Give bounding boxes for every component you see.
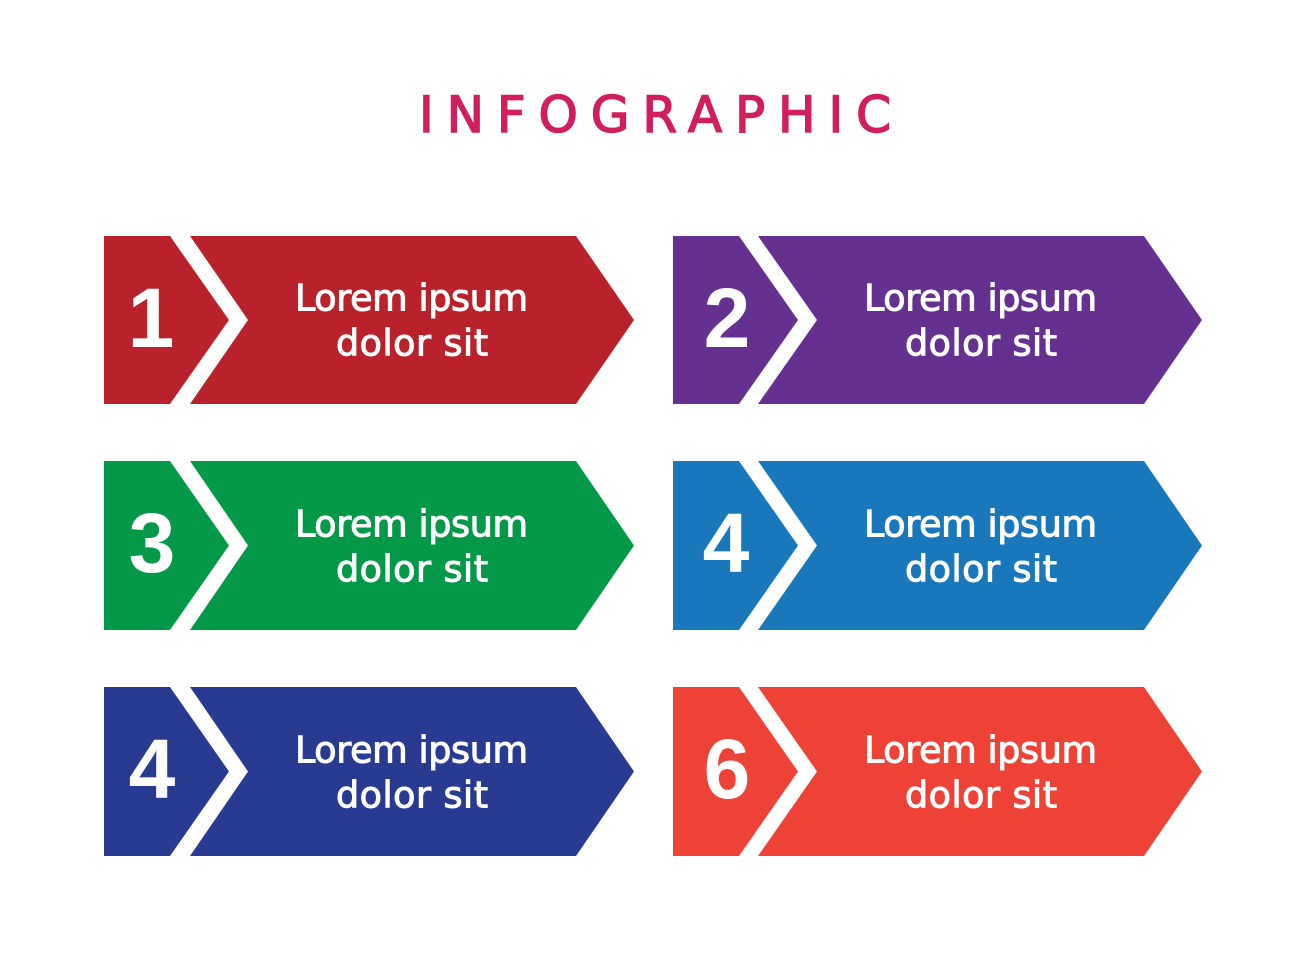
arrow body 1 bbox=[190, 236, 634, 404]
arrow body 2 bbox=[758, 236, 1202, 404]
number 4: 4 bbox=[703, 496, 750, 590]
label 4: Lorem ipsum bbox=[864, 502, 1097, 546]
label 4: dolor sit bbox=[905, 548, 1057, 590]
panel: item 2 bbox=[673, 236, 1202, 404]
number tab 1 bbox=[104, 236, 229, 404]
number tab 5 bbox=[104, 687, 229, 856]
panel: item 5 (labelled 4) bbox=[104, 687, 634, 856]
arrow body 6 bbox=[758, 687, 1202, 856]
number 3: 3 bbox=[129, 496, 175, 590]
label 5: Lorem ipsum bbox=[295, 728, 528, 772]
number tab 4 bbox=[673, 461, 798, 630]
label 1: Lorem ipsum bbox=[295, 276, 528, 320]
label 2: Lorem ipsum bbox=[864, 276, 1097, 320]
number tab 6 bbox=[673, 687, 798, 856]
label 1: dolor sit bbox=[336, 322, 488, 364]
panel: item 3 bbox=[104, 461, 634, 630]
number 2: 2 bbox=[704, 271, 750, 365]
label 3: Lorem ipsum bbox=[295, 502, 528, 546]
arrow body 5 bbox=[190, 687, 634, 856]
label 6: Lorem ipsum bbox=[864, 728, 1097, 772]
panel: item 4 (right) bbox=[673, 461, 1202, 630]
arrow body 3 bbox=[190, 461, 634, 630]
title: INFOGRAPHIC bbox=[419, 86, 891, 144]
number tab 2 bbox=[673, 236, 798, 404]
panel: item 6 bbox=[673, 687, 1202, 856]
number 6: 6 bbox=[704, 722, 750, 816]
number 5: 4 bbox=[129, 722, 176, 816]
label 3: dolor sit bbox=[336, 548, 488, 590]
label 6: dolor sit bbox=[905, 774, 1057, 816]
arrow body 4 bbox=[758, 461, 1202, 630]
number tab 3 bbox=[104, 461, 229, 630]
label 5: dolor sit bbox=[336, 774, 488, 816]
number 1: 1 bbox=[128, 271, 174, 365]
label 2: dolor sit bbox=[905, 322, 1057, 364]
panel: item 1 bbox=[104, 236, 634, 404]
